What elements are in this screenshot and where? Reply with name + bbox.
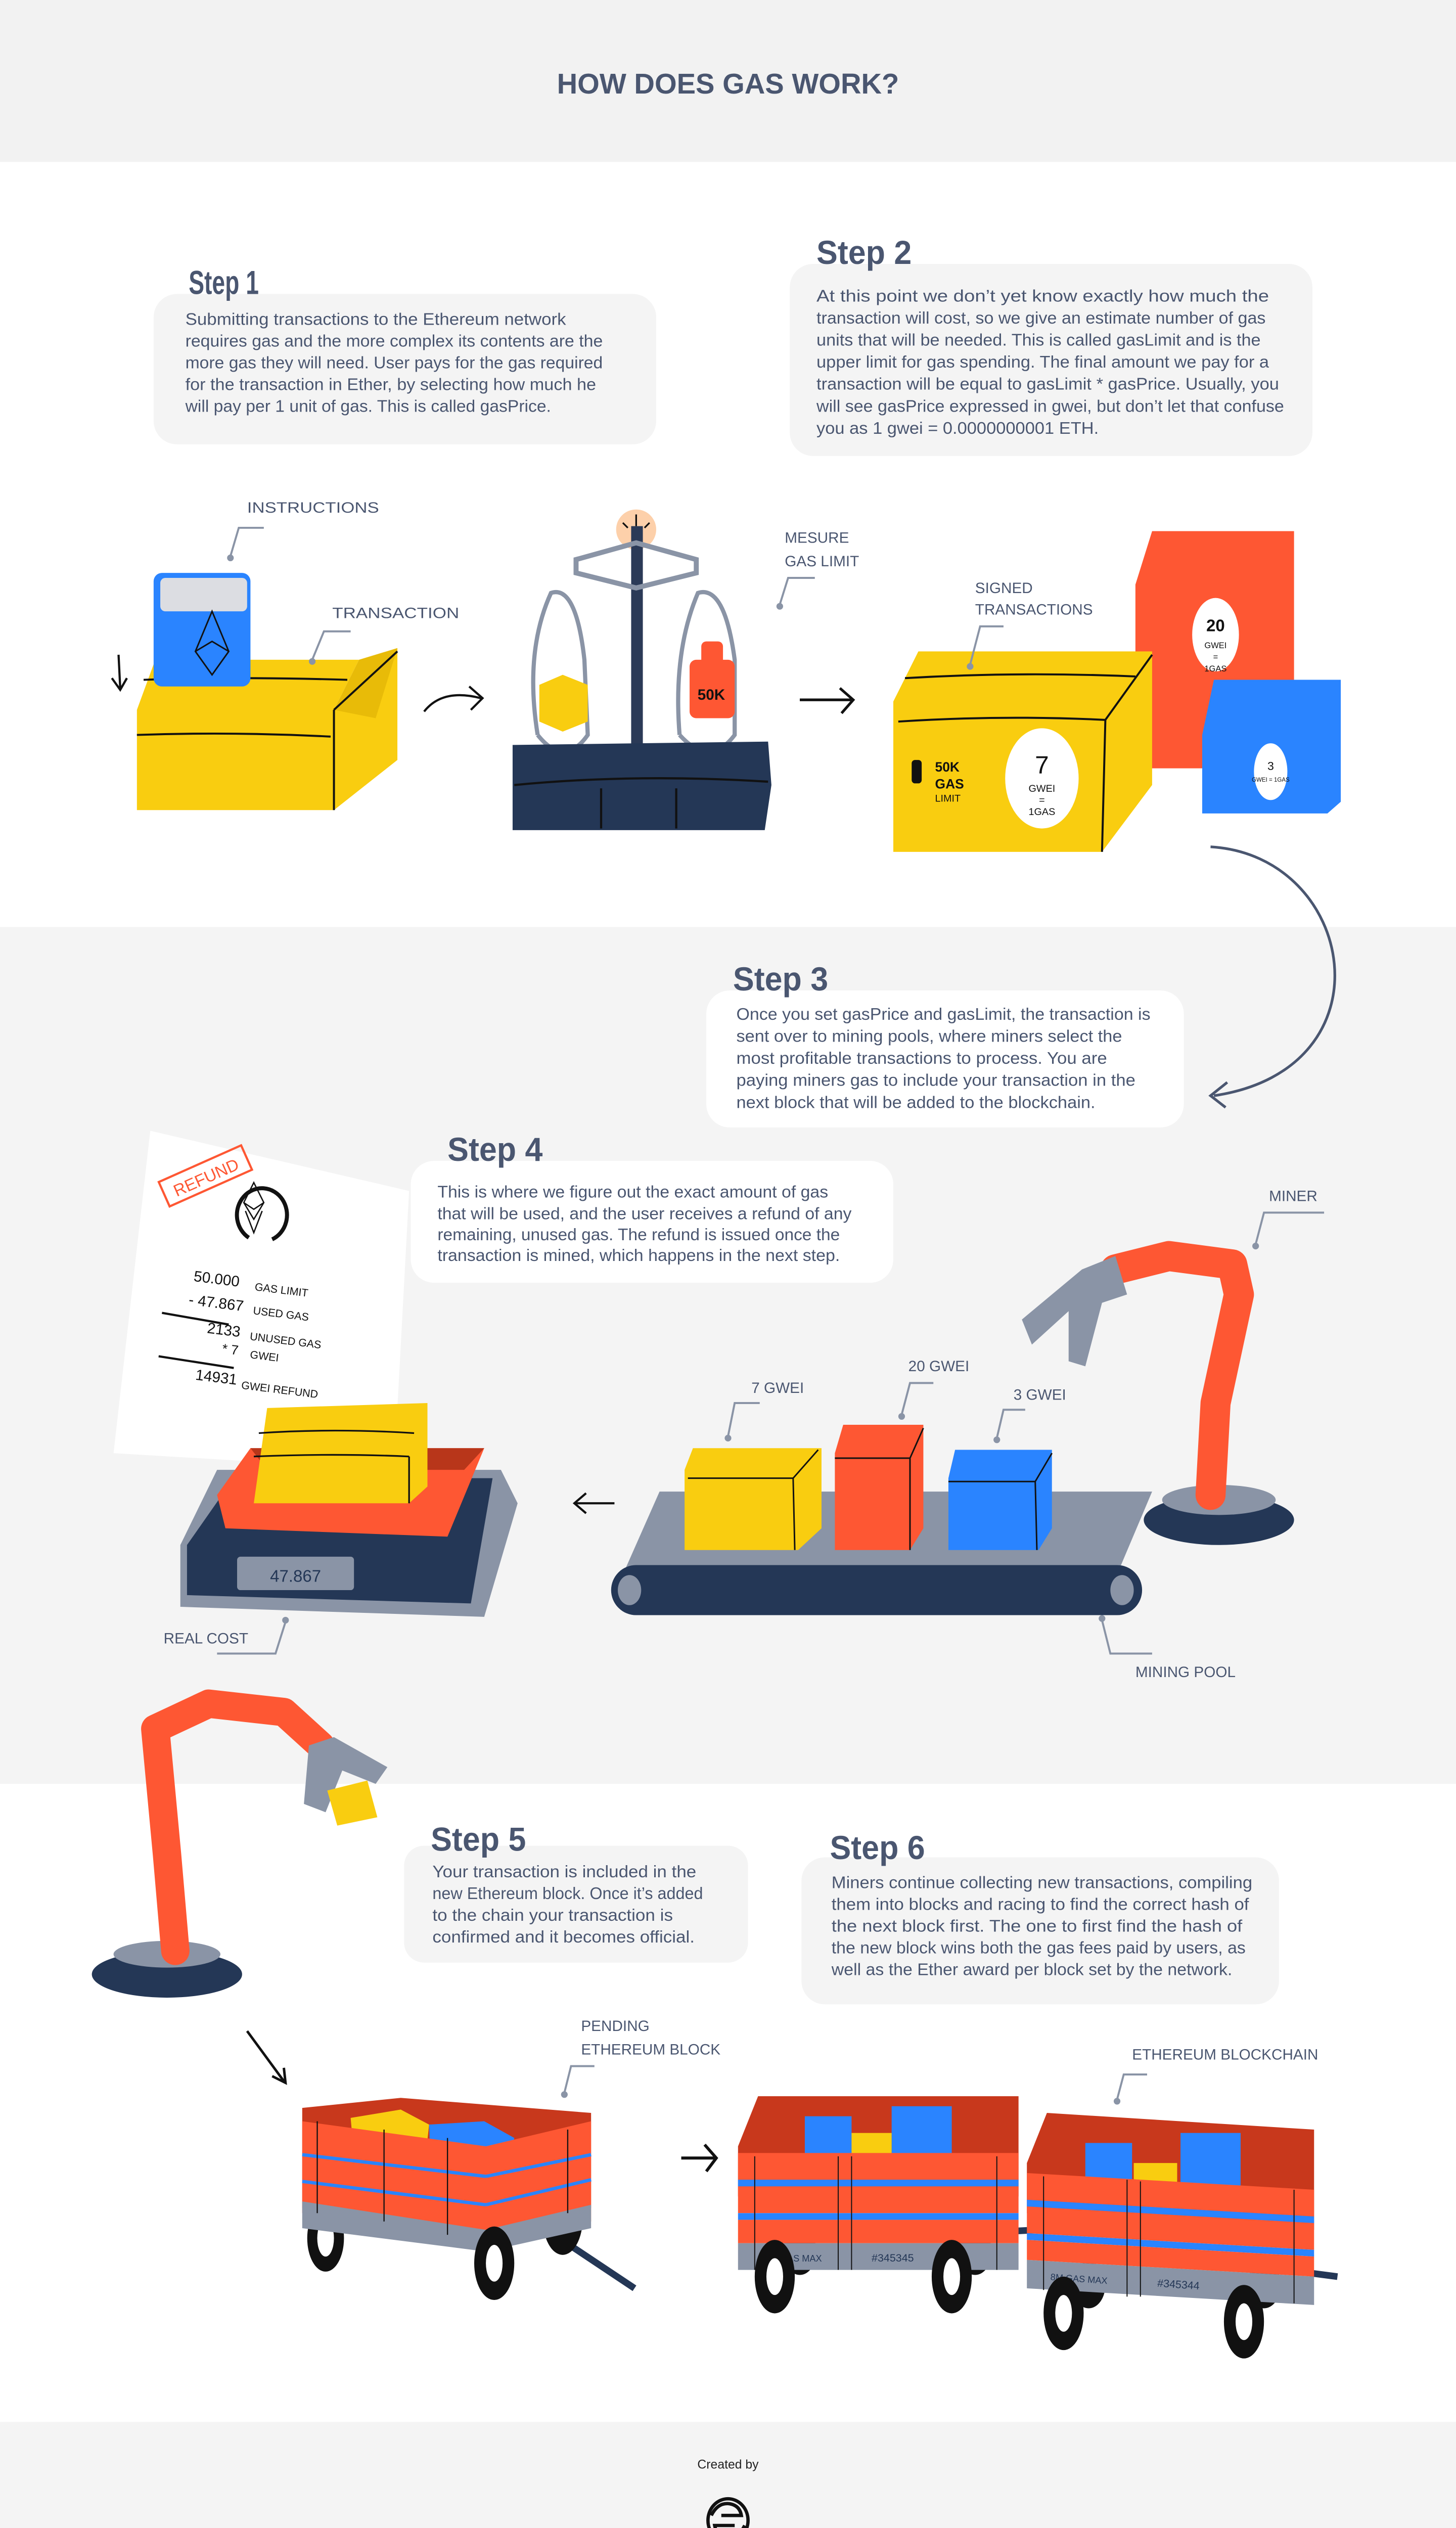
illustration: scale measuring gas limit — [513, 510, 859, 830]
text box: step 5 — [404, 1845, 748, 1963]
illustration: scale measuring gas limit: 50K — [698, 687, 725, 703]
heading: step 1: Step 1 — [189, 263, 259, 301]
illustration: signed transactions: 1GAS — [1204, 664, 1226, 673]
text box: step 6: Miners continue collecting new transactions, compiling — [832, 1873, 1252, 1892]
panel: step 6 — [801, 1829, 1279, 2004]
receipt calculation: 14931 — [195, 1367, 238, 1388]
label: transaction: TRANSACTION — [332, 605, 459, 621]
stamp: refund — [159, 1145, 252, 1206]
arrow: step1 to scale — [424, 687, 482, 711]
text box: step 1: will pay per 1 unit of gas. This is called gasPrice. — [185, 396, 551, 415]
text box: step 4 — [411, 1161, 893, 1283]
text box: step 3: paying miners gas to include your transaction in the — [737, 1071, 1135, 1090]
panel: step 2 — [790, 234, 1312, 456]
receipt calculation: USED GAS — [252, 1304, 309, 1324]
label: instructions — [227, 500, 379, 561]
text box: step 6: well as the Ether award per block set by the network. — [831, 1960, 1232, 1978]
illustration: signed transactions: 50K — [935, 759, 960, 775]
icon: decenter logo — [708, 2499, 748, 2528]
label: miner: MINER — [1269, 1188, 1317, 1204]
yellow box — [137, 710, 334, 810]
arrow: robot to pending block — [247, 2031, 286, 2083]
label: mining pool — [1099, 1615, 1236, 1681]
illustration: signed transactions: GAS — [935, 776, 964, 791]
arrow: to blockchain — [681, 2145, 716, 2172]
icon: blue instruction book — [154, 573, 250, 687]
receipt calculation: GWEI REFUND — [241, 1379, 318, 1401]
text box: step 2 — [790, 264, 1312, 456]
panel: step 1 — [154, 263, 656, 444]
illustration: signed transactions — [893, 531, 1341, 852]
illustration: miner robot arm — [1022, 1188, 1324, 1681]
illustration: signed transactions: = — [1039, 795, 1045, 806]
label: transaction — [309, 605, 459, 665]
label: ethereum blockchain — [1114, 2046, 1318, 2104]
text box: step 2: transaction will be equal to gasLimit * gasPrice. Usually, you — [816, 375, 1279, 393]
text box: step 6 — [801, 1858, 1279, 2004]
text box: step 1: more gas they will need. User pays for the gas required — [186, 353, 603, 372]
label: signed transactions: SIGNED — [975, 580, 1033, 597]
yellow box — [893, 651, 1152, 852]
illustration: refund receipt — [114, 1131, 409, 1470]
text box: step 2: transaction will cost, so we give an estimate number of gas — [816, 308, 1265, 327]
heading: step 4: Step 4 — [447, 1131, 543, 1168]
illustration: signed transactions: GWEI — [1204, 641, 1226, 650]
receipt calculation: 2133 — [206, 1320, 242, 1340]
labels: gwei: 7 GWEI — [751, 1380, 804, 1396]
labels: gwei: 3 GWEI — [1014, 1386, 1066, 1403]
illustration: real cost scale — [164, 1403, 518, 1654]
arrow: to real cost — [574, 1493, 614, 1513]
illustration: mining pool conveyor — [611, 1358, 1152, 1615]
text box: step 2: you as 1 gwei = 0.0000000001 ETH. — [816, 419, 1099, 437]
text box: step 3: next block that will be added to the blockchain. — [737, 1093, 1096, 1111]
receipt calculation: * 7 — [221, 1341, 239, 1358]
label: mesure gas limit: MESURE — [785, 530, 849, 547]
receipt calculation: UNUSED GAS — [249, 1330, 322, 1351]
heading: step 2: Step 2 — [816, 234, 912, 271]
text box: step 6: the next block first. The one to first find the hash of — [832, 1917, 1243, 1935]
illustration: signed transactions: GWEI — [1029, 783, 1055, 794]
illustration: real cost scale: 47.867 — [270, 1566, 321, 1585]
box: red 20 gwei — [835, 1425, 923, 1550]
panel: step 3 — [706, 960, 1184, 1127]
title: HOW DOES GAS WORK? — [557, 68, 899, 100]
label: pending ethereum block — [561, 2018, 720, 2098]
wagon #345344 — [1027, 2113, 1338, 2359]
wagon #345344: 8M GAS MAX — [1050, 2272, 1108, 2286]
text box: step 5: confirmed and it becomes official. — [432, 1927, 695, 1946]
text box: step 5: new Ethereum block. Once it’s added — [432, 1884, 703, 1903]
heading: step 6: Step 6 — [830, 1829, 925, 1866]
text box: step 1 — [154, 294, 656, 444]
heading: step 3: Step 3 — [733, 960, 828, 998]
labels: gwei — [724, 1358, 1066, 1443]
icon: ether refresh — [237, 1183, 287, 1239]
receipt calculation: GAS LIMIT — [254, 1281, 309, 1299]
labels: gwei: 20 GWEI — [908, 1358, 969, 1375]
text box: step 1: requires gas and the more complex its contents are the — [186, 331, 603, 350]
label: instructions: INSTRUCTIONS — [247, 500, 379, 516]
text box: step 3: most profitable transactions to process. You are — [737, 1049, 1107, 1067]
wagon #345345: 8M GAS MAX — [765, 2253, 822, 2264]
label: ethereum blockchain: ETHEREUM BLOCKCHAIN — [1132, 2046, 1318, 2063]
text box: step 5: to the chain your transaction is — [432, 1906, 673, 1924]
icon: down arrow — [112, 655, 127, 690]
text box: step 2: will see gasPrice expressed in gwei, but don’t let that confuse — [816, 396, 1284, 415]
text box: step 4: that will be used, and the user receives a refund of any — [437, 1204, 852, 1223]
text box: step 4: transaction is mined, which happens in the next step. — [437, 1246, 840, 1265]
illustration: pending ethereum block wagon — [302, 2018, 720, 2300]
text box: step 3: Once you set gasPrice and gasLimit, the transaction is — [737, 1005, 1151, 1023]
text box: step 4: remaining, unused gas. The refund is issued once the — [437, 1225, 840, 1244]
text box: step 5: Your transaction is included in the — [432, 1862, 696, 1881]
illustration: signed transactions: 20 — [1206, 616, 1225, 635]
box: blue 3 gwei — [948, 1450, 1052, 1550]
text box: step 3 — [706, 990, 1184, 1127]
arrow: scale to signed transactions — [800, 688, 853, 713]
label: mining pool: MINING POOL — [1135, 1664, 1236, 1681]
text box: step 2: units that will be needed. This is called gasLimit and is the — [816, 331, 1261, 349]
blue box — [1202, 680, 1341, 814]
label: signed transactions: TRANSACTIONS — [975, 602, 1093, 618]
text box: step 2: upper limit for gas spending. The final amount we pay for a — [816, 352, 1269, 371]
illustration: signed transactions: 3 — [1267, 759, 1274, 773]
label: pending ethereum block: ETHEREUM BLOCK — [581, 2041, 720, 2058]
label: signed transactions — [967, 580, 1093, 670]
illustration: signed transactions: GWEI = 1GAS — [1252, 777, 1290, 783]
label: pending ethereum block: PENDING — [581, 2018, 650, 2035]
text box: step 4: This is where we figure out the exact amount of gas — [437, 1183, 828, 1201]
label: mesure gas limit: GAS LIMIT — [785, 553, 859, 570]
stamp: refund: REFUND — [170, 1155, 242, 1200]
panel: step 4 — [411, 1131, 893, 1283]
receipt calculation — [159, 1268, 323, 1401]
text box: step 6: the new block wins both the gas fees paid by users, as — [832, 1938, 1246, 1957]
arrow: curved to step 3 — [1210, 847, 1335, 1107]
receipt calculation: GWEI — [249, 1348, 280, 1364]
illustration: signed transactions: LIMIT — [935, 793, 961, 804]
label: real cost — [164, 1617, 289, 1654]
text box: step 6: them into blocks and racing to find the correct hash of — [832, 1895, 1249, 1914]
footer — [671, 2458, 784, 2528]
receipt calculation: - 47.867 — [188, 1291, 245, 1315]
panel: step 5 — [404, 1820, 748, 1963]
text box: step 1: for the transaction in Ether, by selecting how much he — [186, 375, 596, 393]
red box — [1135, 531, 1294, 769]
illustration: signed transactions: 1GAS — [1029, 806, 1055, 818]
illustration: ethereum blockchain wagons — [738, 2046, 1338, 2359]
wagon #345345: #345345 — [872, 2252, 914, 2264]
wagon #345344: #345344 — [1157, 2277, 1200, 2292]
illustration: step 5 robot arm — [92, 1704, 387, 1998]
illustration: signed transactions: = — [1213, 653, 1218, 662]
illustration: transaction box with instructions — [112, 500, 459, 810]
text box: step 3: sent over to mining pools, where miners select the — [737, 1026, 1122, 1045]
text box: step 2: At this point we don’t yet know exactly how much the — [816, 286, 1269, 305]
illustration: signed transactions: 7 — [1035, 751, 1049, 779]
label: miner — [1252, 1188, 1324, 1249]
box: yellow 7 gwei — [685, 1448, 822, 1550]
label: mesure gas limit — [777, 530, 859, 610]
wagon #345345 — [738, 2096, 1038, 2313]
label: real cost: REAL COST — [164, 1631, 248, 1647]
text box: step 1: Submitting transactions to the Ethereum network — [186, 310, 566, 329]
footer: Created by — [697, 2458, 759, 2472]
heading: step 5: Step 5 — [431, 1820, 526, 1858]
receipt calculation: 50.000 — [193, 1268, 241, 1290]
